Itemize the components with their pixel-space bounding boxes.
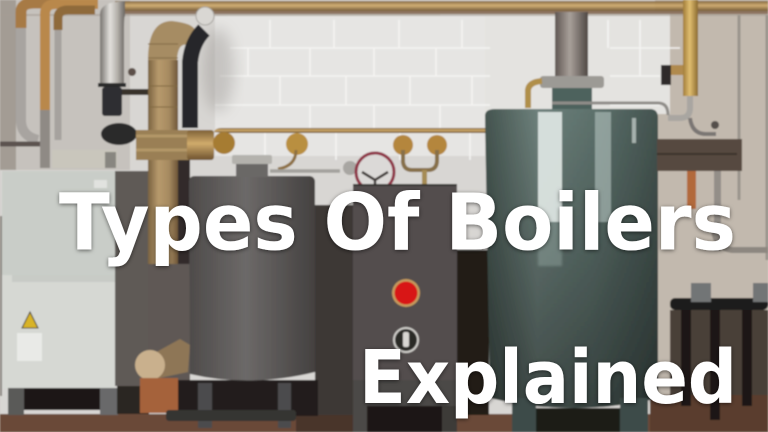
lower flue shadow column — [148, 264, 190, 399]
dark gap — [457, 250, 489, 415]
warning label — [17, 312, 42, 361]
grey tank — [178, 155, 318, 416]
green tank flue — [528, 12, 668, 115]
brass horizontal wall pipe — [213, 128, 488, 175]
left copper pipes — [0, 3, 98, 168]
red button — [392, 279, 420, 307]
black hose — [190, 30, 204, 128]
dark pipe behind tee — [178, 160, 190, 300]
top pipes — [0, 1, 768, 16]
red wheel valve — [356, 153, 394, 191]
log — [135, 339, 190, 413]
left white boiler — [0, 150, 149, 415]
brown wall box — [657, 139, 768, 251]
floor — [0, 395, 768, 432]
glass valve — [196, 7, 214, 25]
green tank — [485, 109, 658, 432]
grey tank legs — [166, 383, 296, 428]
twin valves — [393, 135, 447, 184]
wall shadow behind brass flue — [202, 28, 234, 112]
silver flue — [98, 1, 148, 145]
title: Explained: Explained — [359, 335, 737, 421]
central control box — [353, 184, 457, 432]
brass flue and tee — [136, 21, 214, 264]
dial — [394, 328, 418, 352]
side table and cups — [670, 283, 768, 420]
dark background between tanks — [315, 205, 353, 415]
title: Types Of Boilers: Types Of Boilers — [59, 178, 736, 268]
brass riser and drain — [661, 0, 767, 260]
brick lines — [215, 20, 680, 160]
